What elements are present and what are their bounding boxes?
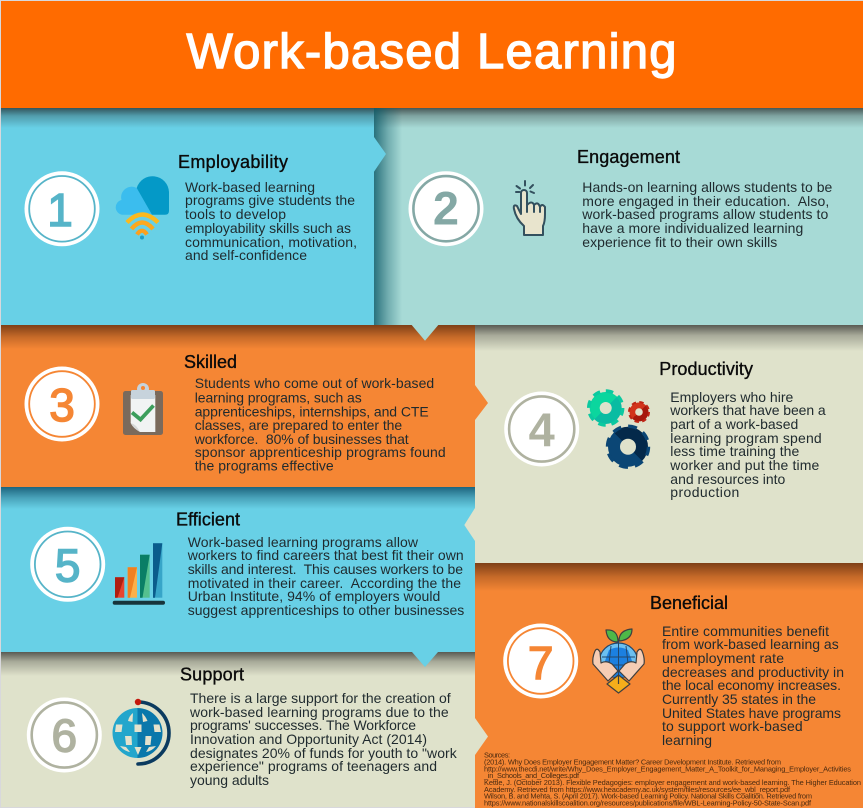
number badge 4: 4 [529,403,555,456]
text: Skilled body: classes, are prepared to enter the [195,417,402,433]
panel: productivity [464,325,863,563]
text: Engagement body: Hands-on learning allows students to be [582,179,833,195]
panel: efficient [1,487,475,667]
text: Skilled body [194,375,446,474]
sources: http://www.thecdi.net/write/Why_Does_Employer_Engagement_Matter_A_Toolkit_for_Managing_Employer_Activities [484,764,851,774]
text: Beneficial body: unemployment rate [662,650,784,666]
text: Beneficial body: Entire communities benefit [662,623,829,639]
text: Efficient body [187,534,464,618]
heading: Skilled: Skilled [184,352,237,372]
sources [483,750,861,808]
text: Productivity body: and resources into [670,471,786,487]
text: Skilled body: sponsor apprenticeship programs found [195,444,446,460]
number badge 6: 6 [52,710,77,762]
arrow: productivity to efficient [464,508,475,541]
text: Employability body: communication, motivation, [185,234,357,250]
text: Employability body: and self-confidence [185,247,307,263]
sources: Wilson, B. and Mehta, S. (April 2017). Work-based Learning Policy. National Skills Coalition. Retrieved from [484,792,812,800]
title: Work-based Learning [186,25,676,79]
panel: beneficial [475,563,863,808]
text: Support body: There is a large support for the creation of [190,690,451,706]
text: Skilled body: Students who come out of work-based [195,375,434,391]
text: Engagement body [581,179,833,250]
text: Employability body: employability skills such as [185,220,351,236]
text: Productivity body: production [670,484,739,500]
text: Productivity body: part of a work-based [670,416,798,432]
text: Beneficial body: to support work-based [662,718,803,734]
text: Engagement body: more engaged in their education. Also, [582,193,829,209]
number badge 1 [24,171,100,246]
heading: Efficient: Efficient [176,510,240,530]
text: Skilled body: the programs effective [195,458,334,474]
heading: Support: Support [180,664,244,684]
text: Employability body [185,179,357,263]
number badge 7 [503,624,578,698]
text: Employability body: programs give students the [185,192,355,208]
arrow: support to beneficial [475,718,488,755]
text: Productivity body [669,389,826,500]
heading: Beneficial: Beneficial [650,593,728,613]
text: Engagement body: have a more individualized learning [582,220,803,236]
text: Support body: young adults [190,772,269,788]
text: Efficient body: skills and interest. This causes workers to be [188,561,463,577]
number badge 2: 2 [433,182,459,234]
text: Engagement body: experience fit to their own skills [582,234,777,250]
icon: cloud with wifi [116,176,169,240]
text: Support body: experience" programs of teenagers and [190,758,437,774]
text: Beneficial body [662,623,844,748]
text: Efficient body: suggest apprenticeships to other businesses [188,602,464,618]
panel: skilled [1,325,488,487]
text: Efficient body: Urban Institute, 94% of employers would [188,588,440,604]
number badge 4 [504,392,579,466]
arrow: employability to engagement [374,137,386,172]
text: Efficient body: workers to find careers that best fit their own [187,547,464,563]
sources: _in_Schools_and_Colleges.pdf [483,771,580,780]
sources: Kettle, J. (October 2013). Flexible Pedagogies: employer engagement and work-based learning. The Higher Education [484,778,861,787]
sources: Academy. Retrieved from https://www.heacademy.ac.uk/system/files/resources/ee_wbl_report.pdf [484,785,791,794]
text: Productivity body: less time training the [670,443,800,459]
text: Productivity body: worker and put the time [669,457,820,473]
text: Skilled body: workforce. 80% of businesses that [194,431,409,447]
text: Efficient body: Work-based learning programs allow [188,534,419,550]
text: Productivity body: Employers who hire [670,389,794,405]
number badge 6 [27,698,102,772]
number badge 7: 7 [528,637,553,689]
icon: clipboard with check [123,383,163,435]
number badge 5: 5 [55,540,80,592]
text: Efficient body: motivated in their career. According the the [188,575,461,591]
sources: (2014). Why Does Employer Engagement Matter? Career Development Institute. Retrieved from [484,758,781,766]
icon: gears [589,391,649,467]
icon: globe [112,699,169,764]
icon: bar chart [113,543,165,605]
icon: pointing hand [514,181,545,235]
number badge 5 [30,527,105,602]
text: Engagement body: work-based programs allow students to [581,206,829,222]
sources: https://www.nationalskillscoalition.org/resources/publications/file/WBL-Learning-Policy-50-State-Scan.pdf [484,798,812,808]
heading: Engagement: Engagement [577,147,680,167]
text: Support body: designates 20% of funds for youth to "work [190,745,458,761]
heading: Productivity: Productivity [659,359,753,379]
icon: hands holding globe [593,629,644,693]
number badge 2 [408,171,484,246]
panel: engagement [374,108,863,341]
text: Productivity body: workers that have been a [669,402,826,418]
text: Beneficial body: the local economy increases. [662,677,841,693]
sources: Sources: [484,750,510,760]
number badge 1: 1 [47,184,73,236]
panel: employability [1,108,386,325]
text: Support body: Innovation and Opportunity Act (2014) [190,731,427,747]
text: Beneficial body: from work-based learning as [662,636,839,652]
text: Employability body: Work-based learning [185,179,315,195]
text: Beneficial body: decreases and productivity in [662,664,844,680]
text: Skilled body: learning programs, such as [195,390,362,406]
number badge 3: 3 [49,379,75,431]
arrow: skilled to productivity [475,385,488,420]
arrow: engagement to skilled [412,325,438,341]
panel: support [1,652,488,807]
text: Support body [189,690,458,788]
header banner [1,1,863,108]
text: Support body: programs' successes. The Workforce [190,717,416,733]
text: Beneficial body: Currently 35 states in the [662,691,816,707]
text: Support body: work-based learning programs due to the [189,704,449,720]
text: Beneficial body: United States have programs [662,705,841,721]
number badge 3 [24,366,100,442]
text: Employability body: tools to develop [185,206,286,222]
text: Beneficial body: learning [662,732,712,748]
text: Skilled body: apprenticeships, internships, and CTE [195,404,429,420]
heading: Employability: Employability [178,152,288,172]
arrow: efficient to support [412,652,438,667]
text: Productivity body: learning program spend [670,430,822,446]
